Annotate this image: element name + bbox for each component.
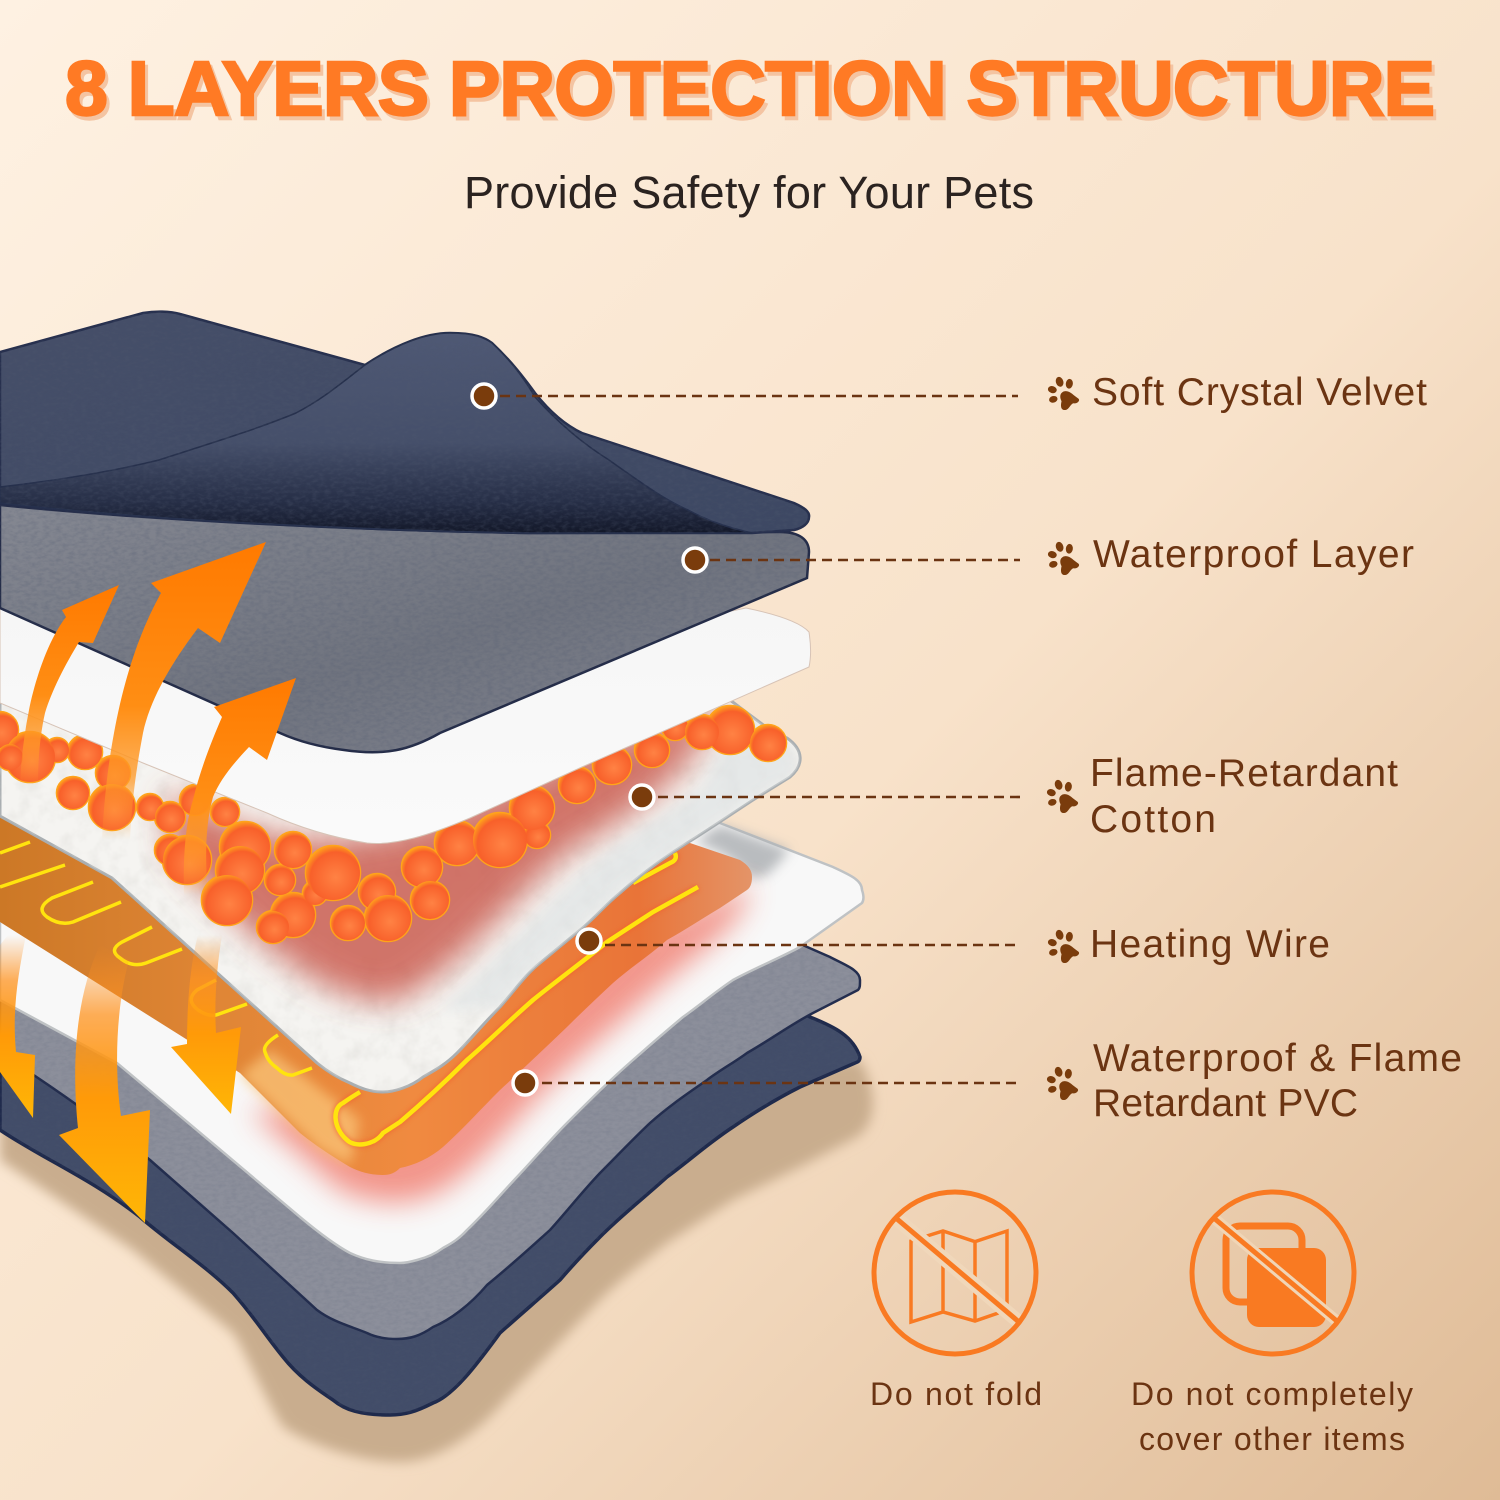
arrow: down large	[59, 945, 150, 1223]
layer: lower gray fabric	[0, 946, 862, 1340]
arrow: down right	[171, 935, 241, 1114]
callout: waterproof and flame retardant PVC: Waterproof & Flame	[1093, 1037, 1462, 1080]
callout: heating wire	[577, 923, 1330, 966]
callout: waterproof layer: Waterproof Layer	[1093, 533, 1414, 576]
arrow: up left	[20, 585, 119, 785]
warm bubbles	[0, 706, 786, 943]
arrows: heat rising	[20, 542, 296, 895]
callout: waterproof and flame retardant PVC	[513, 1037, 1462, 1125]
callout: flame-retardant cotton: Cotton	[1090, 798, 1216, 841]
title: 8 LAYERS PROTECTION STRUCTURE	[65, 46, 1435, 132]
layer: waterproof PVC white sheet	[0, 800, 864, 1263]
subtitle: Provide Safety for Your Pets	[464, 167, 1034, 218]
note: do not fold: Do not fold	[870, 1376, 1042, 1412]
callout: heating wire: Heating Wire	[1090, 923, 1330, 966]
icon: do not cover	[1192, 1192, 1354, 1354]
layer: gray waterproof	[0, 500, 820, 760]
note: do not completely cover: Do not completely	[1131, 1376, 1413, 1412]
arrow: up large	[102, 542, 266, 840]
mat layered illustration	[0, 305, 873, 1462]
callout: soft crystal velvet	[472, 371, 1427, 414]
callout: flame-retardant cotton: Flame-Retardant	[1090, 752, 1398, 795]
note: do not completely cover	[1131, 1376, 1413, 1457]
callout: flame-retardant cotton	[630, 752, 1398, 841]
shadow from cotton on white sheet	[695, 825, 790, 878]
ground shadow	[0, 1060, 873, 1462]
callout: waterproof layer	[683, 533, 1414, 576]
callout: waterproof and flame retardant PVC: Retardant PVC	[1093, 1082, 1358, 1125]
arrows: heat descending	[0, 935, 241, 1223]
layer: soft crystal velvet	[0, 305, 820, 535]
icon: do not fold	[874, 1192, 1036, 1354]
callout: soft crystal velvet: Soft Crystal Velvet	[1092, 371, 1427, 414]
note: do not completely cover: cover other items	[1139, 1421, 1405, 1457]
layer: flame-retardant cotton	[0, 690, 820, 1100]
red glow under heating pad	[250, 885, 750, 1203]
layer: upper white sheet	[0, 595, 810, 843]
title: 8 LAYERS PROTECTION STRUCTURE	[68, 50, 1438, 136]
layer: bottom navy fabric	[0, 1016, 862, 1417]
arrow: up right	[184, 678, 296, 895]
arrow: down left	[0, 935, 35, 1118]
heating pad with wire	[0, 800, 752, 1175]
